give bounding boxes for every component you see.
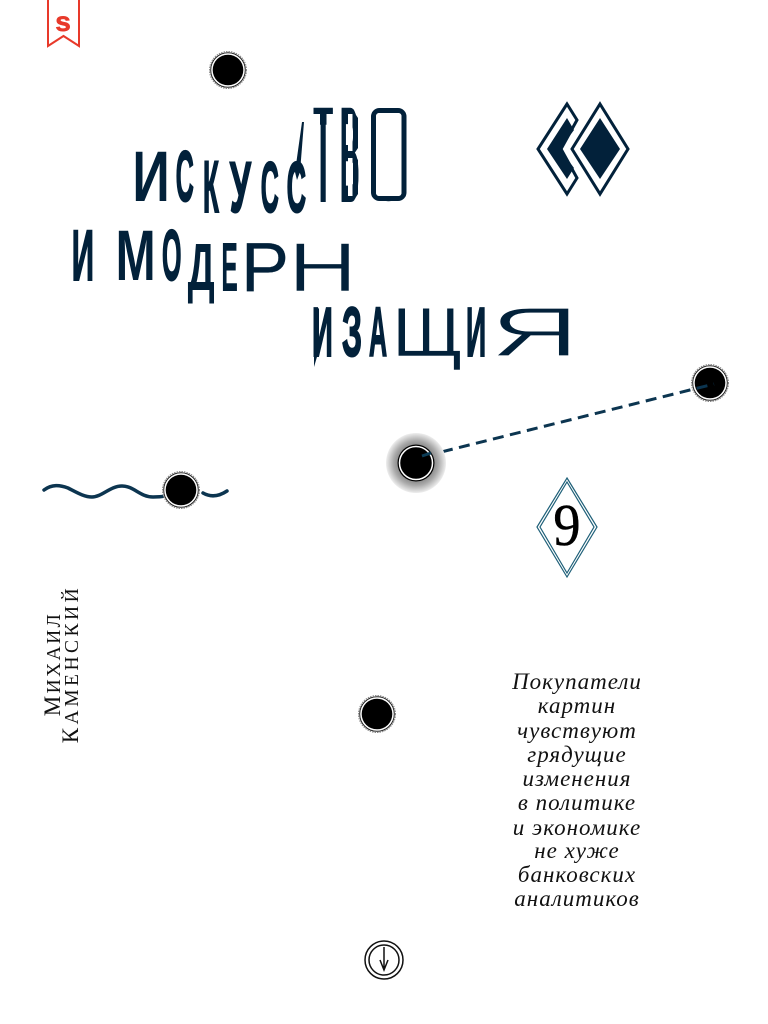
- title: Е: [221, 228, 238, 307]
- quote: чувствуют: [517, 718, 637, 743]
- title: Я: [490, 293, 580, 371]
- wave line: [44, 486, 227, 497]
- quote: банковских: [518, 862, 636, 887]
- title: Н: [288, 228, 357, 306]
- title: О: [162, 217, 181, 296]
- title: У: [230, 148, 252, 227]
- icon: bookmark logo: [48, 0, 79, 46]
- quote: [511, 669, 642, 911]
- author name: [40, 585, 83, 743]
- quote: и экономике: [513, 815, 641, 840]
- quote: аналитиков: [514, 886, 640, 911]
- title: А: [369, 293, 387, 372]
- title: И: [72, 215, 94, 296]
- quote: грядущие: [527, 742, 627, 767]
- title: М: [116, 216, 156, 295]
- badge: number 9: [537, 478, 597, 577]
- title: И: [132, 138, 170, 217]
- title: С: [176, 138, 194, 217]
- title: Щ: [392, 294, 463, 371]
- title: [72, 80, 580, 372]
- dot: glowing centre: [386, 433, 446, 493]
- title: И: [466, 294, 486, 372]
- title: Р: [241, 229, 289, 307]
- title: З: [342, 293, 362, 371]
- author name: МИХАИЛ: [40, 612, 65, 716]
- title: К: [203, 145, 219, 228]
- icon: double diamond: [538, 104, 628, 194]
- author name: КАМЕНСКИЙ: [58, 585, 83, 743]
- dot: on wave: [162, 472, 200, 508]
- quote: в политике: [518, 790, 636, 815]
- title: С: [261, 149, 279, 228]
- dashed line: [425, 384, 714, 456]
- quote: Покупатели: [511, 669, 642, 694]
- icon: down arrow: [365, 941, 403, 979]
- title: Д: [188, 230, 215, 305]
- title: Т: [313, 80, 333, 230]
- quote: картин: [538, 693, 616, 718]
- dot: right, line end: [692, 364, 728, 402]
- title: С: [287, 149, 306, 228]
- dot: top: [210, 52, 246, 88]
- badge: number 9: 9: [553, 493, 581, 559]
- title: О: [369, 83, 409, 228]
- dot: lower: [358, 696, 396, 732]
- quote: не хуже: [534, 838, 620, 863]
- quote: изменения: [522, 766, 632, 791]
- icon: bookmark logo: s: [55, 6, 71, 37]
- title: И: [312, 295, 333, 372]
- title: В: [340, 82, 359, 230]
